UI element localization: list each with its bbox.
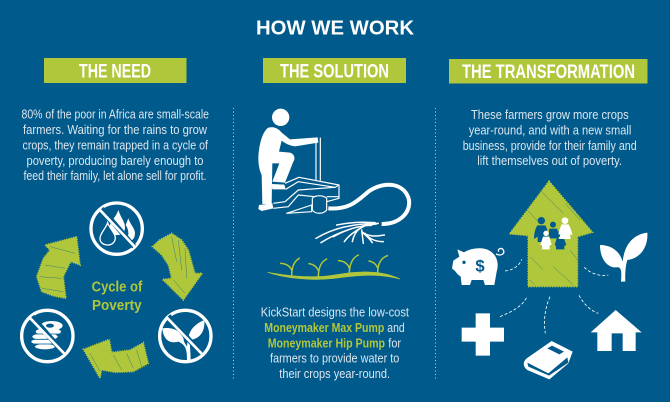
icon: family	[534, 217, 573, 249]
heading: the solution	[263, 58, 406, 83]
diagram: farmer with pump	[258, 109, 409, 279]
text block: the transformation	[463, 107, 637, 168]
text block: the need: feed their family, let alone sell for profit.	[24, 168, 206, 183]
diagram: transformation	[452, 181, 647, 379]
icon: treadle pump	[273, 138, 339, 213]
icon: book	[524, 341, 573, 379]
diagram: cycle of poverty	[22, 203, 211, 378]
icon: hose	[328, 185, 409, 224]
icon: house	[591, 310, 642, 351]
text block: the transformation: year-round, and with a new small	[469, 122, 631, 138]
text block: the need: 80% of the poor in Africa are small-scale	[22, 106, 209, 122]
text block: the transformation: business, provide for their family and	[463, 138, 637, 153]
text block: the need	[22, 106, 209, 183]
heading: the need	[44, 58, 186, 83]
heading: the solution: THE SOLUTION	[280, 60, 389, 82]
text block: the solution: and	[387, 320, 405, 335]
icon: no water	[91, 203, 142, 254]
text block: the transformation: These farmers grow more crops	[471, 107, 629, 122]
icon: farmer	[258, 109, 318, 211]
icon: no crops	[160, 310, 211, 362]
text block: the solution	[261, 305, 409, 381]
text block: the solution: their crops year-round.	[279, 366, 390, 381]
icon: plant	[600, 233, 647, 282]
heading: the need: THE NEED	[79, 60, 151, 82]
text block: the transformation: lift themselves out of poverty.	[477, 153, 622, 168]
label: cycle of poverty: Cycle of	[92, 280, 142, 296]
text block: the solution: Moneymaker Hip Pump	[268, 335, 385, 350]
text block: the solution: Moneymaker Max Pump	[264, 320, 384, 335]
arrow: crops to income	[83, 339, 148, 378]
text block: the need: farmers. Waiting for the rains to grow	[23, 122, 208, 137]
connector: dashed lines	[500, 259, 608, 333]
icon: piggy bank	[452, 248, 504, 285]
arrow: income to water	[37, 237, 80, 298]
icon: medical cross	[462, 313, 504, 356]
icon: upward arrow house	[509, 181, 593, 287]
icon: green crop row	[268, 255, 400, 279]
text block: the solution: KickStart designs the low-cost	[261, 305, 409, 320]
icon: no money	[22, 310, 73, 362]
label: cycle of poverty	[92, 280, 142, 314]
text block: the need: crops, they remain trapped in a cycle of	[22, 138, 208, 152]
icon: piggy bank: $	[475, 257, 485, 276]
arrow: water to crops	[152, 233, 202, 300]
text block: the need: poverty, producing barely enough to	[26, 153, 204, 168]
title: HOW WE WORK	[256, 18, 415, 40]
text block: the solution: for	[388, 335, 402, 350]
icon: water spray	[316, 222, 384, 243]
label: cycle of poverty: Poverty	[92, 298, 142, 314]
text block: the solution: farmers to provide water to	[270, 351, 399, 366]
